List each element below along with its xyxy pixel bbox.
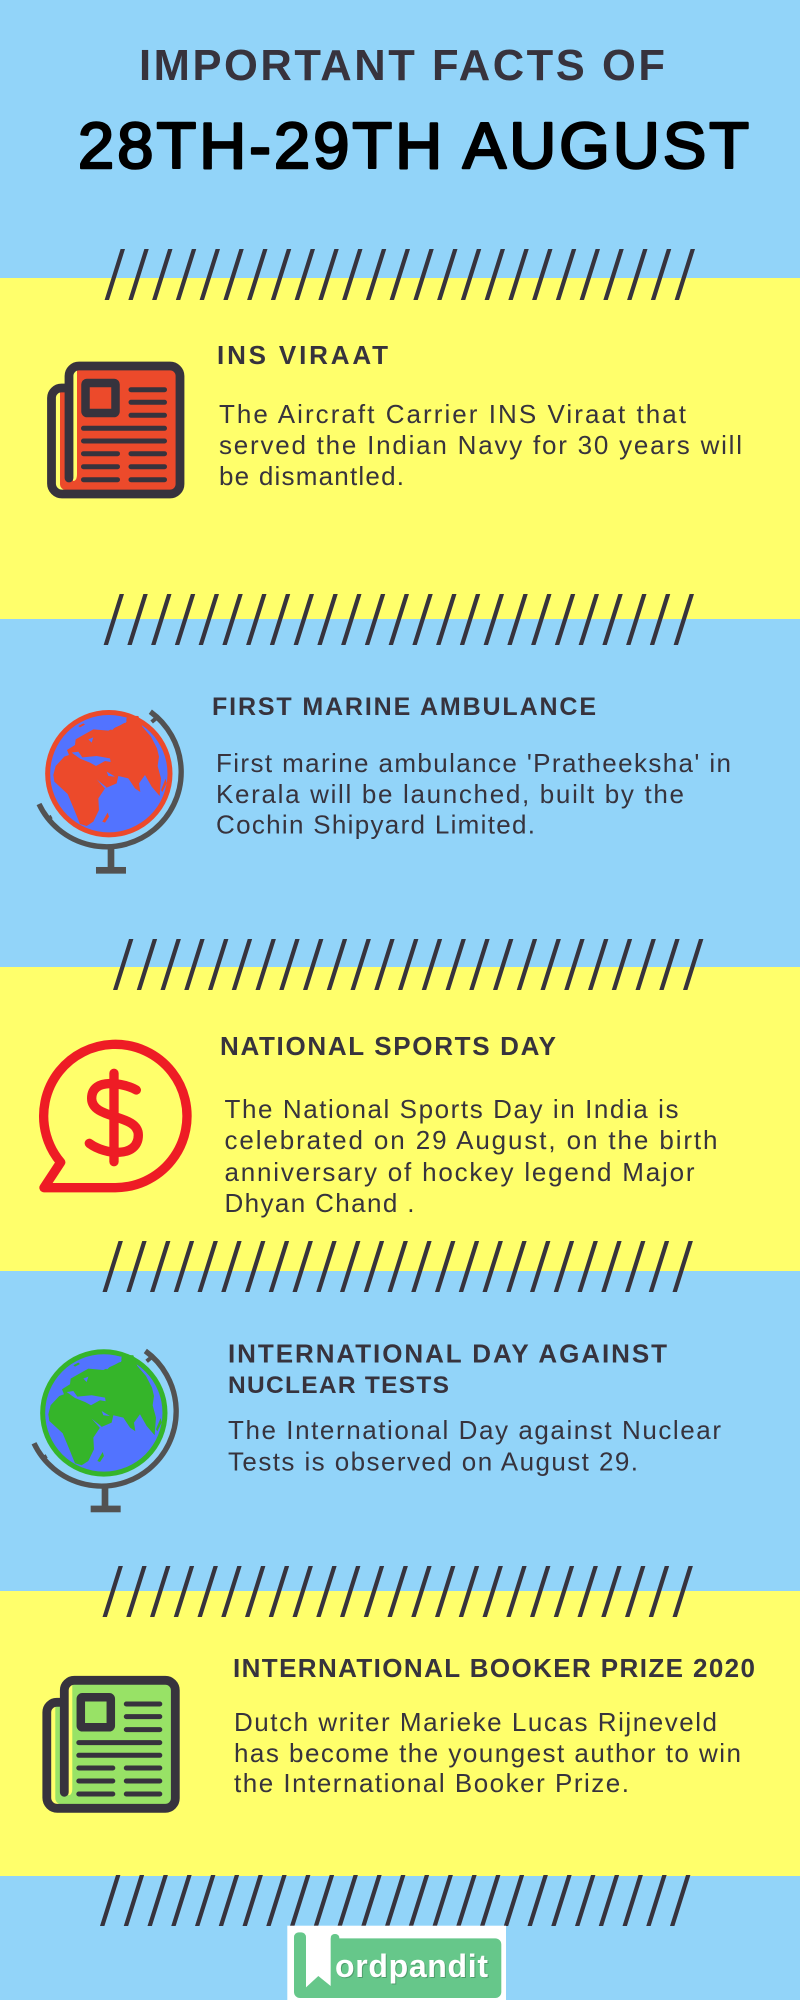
text block: First Marine Ambulance: Cochin Shipyard Limited. bbox=[216, 810, 535, 840]
text block: INS Viraat: be dismantled. bbox=[219, 461, 404, 491]
text block: First Marine Ambulance: Kerala will be launched, built by the bbox=[216, 779, 684, 809]
text block: International Booker Prize 2020 bbox=[234, 1707, 741, 1798]
title bbox=[78, 42, 749, 182]
heading: International Day against Nuclear Tests bbox=[228, 1338, 667, 1399]
text block: National Sports Day: celebrated on 29 August, on the birth bbox=[224, 1125, 718, 1155]
panel: International Day against Nuclear Tests background bbox=[0, 1271, 800, 1591]
text block: INS Viraat bbox=[219, 399, 742, 491]
logo: Wordpandit: ordpandit bbox=[335, 1948, 488, 1984]
heading: International Booker Prize 2020: INTERNATIONAL BOOKER PRIZE 2020 bbox=[233, 1653, 755, 1683]
logo: Wordpandit bbox=[287, 1926, 506, 2000]
heading: INS Viraat: INS VIRAAT bbox=[217, 340, 388, 370]
text block: First Marine Ambulance: First marine ambulance 'Pratheeksha' in bbox=[216, 748, 731, 778]
text block: First Marine Ambulance bbox=[216, 748, 731, 840]
text block: National Sports Day: anniversary of hockey legend Major bbox=[224, 1157, 695, 1187]
text block: International Day against Nuclear Tests: Tests is observed on August 29. bbox=[228, 1446, 638, 1476]
heading: International Day against Nuclear Tests: NUCLEAR TESTS bbox=[228, 1372, 449, 1399]
panel: First Marine Ambulance background bbox=[0, 619, 800, 967]
icon: green globe bbox=[34, 1349, 176, 1512]
icon: dollar speech bubble bbox=[44, 1044, 187, 1188]
panel: header background bbox=[0, 0, 800, 278]
heading: First Marine Ambulance: FIRST MARINE AMBULANCE bbox=[212, 693, 596, 721]
icon: green newspaper bbox=[47, 1680, 175, 1808]
panel: INS Viraat background bbox=[0, 278, 800, 619]
panel: National Sports Day background bbox=[0, 967, 800, 1271]
text block: National Sports Day: The National Sports Day in India is bbox=[224, 1094, 678, 1124]
panel: International Booker Prize background bbox=[0, 1591, 800, 1876]
text block: INS Viraat: served the Indian Navy for 30 years will bbox=[219, 430, 742, 460]
title: IMPORTANT FACTS OF bbox=[139, 42, 665, 90]
heading: International Day against Nuclear Tests: INTERNATIONAL DAY AGAINST bbox=[228, 1338, 667, 1368]
text block: National Sports Day: Dhyan Chand . bbox=[224, 1188, 414, 1218]
icon: red newspaper bbox=[52, 366, 180, 494]
icon: red globe bbox=[39, 710, 181, 874]
text block: International Booker Prize 2020: has become the youngest author to win bbox=[234, 1738, 741, 1768]
text block: International Booker Prize 2020: Dutch writer Marieke Lucas Rijneveld bbox=[234, 1707, 717, 1737]
text block: International Day against Nuclear Tests: The International Day against Nuclear bbox=[228, 1415, 721, 1445]
text block: International Booker Prize 2020: the International Booker Prize. bbox=[234, 1768, 629, 1798]
panel: footer background bbox=[0, 1876, 800, 2000]
text block: International Day against Nuclear Tests bbox=[228, 1415, 721, 1476]
text block: National Sports Day bbox=[224, 1094, 718, 1218]
title: 28TH-29TH AUGUST bbox=[78, 109, 749, 182]
text block: INS Viraat: The Aircraft Carrier INS Viraat that bbox=[219, 399, 687, 429]
heading: National Sports Day: NATIONAL SPORTS DAY bbox=[220, 1031, 556, 1061]
